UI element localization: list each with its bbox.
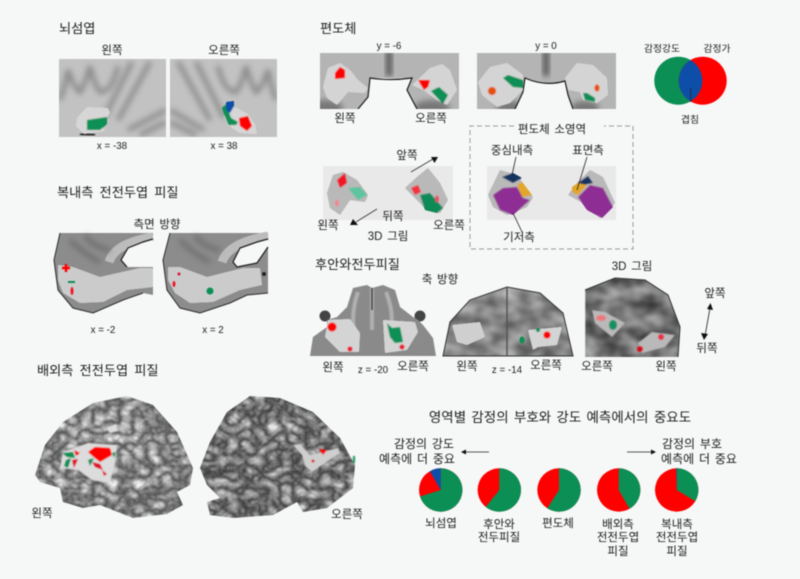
label: vmPFC: 피질: [666, 545, 688, 558]
chart title: 영역별 감정의 부호와 강도 예측에서의 중요도: [429, 410, 691, 425]
labels: z = -14 row: [456, 359, 562, 376]
panel: amygdala 3D view: [317, 149, 465, 243]
label: left: 왼쪽: [655, 359, 677, 373]
label: anterior: 앞쪽: [396, 149, 418, 162]
heading: dlPFC: 배외측 전전두엽 피질: [37, 363, 159, 378]
brain slice: y = -6: [319, 52, 460, 110]
heading: amygdala: 편도체: [320, 21, 356, 36]
label: x = -2: x = -2: [91, 325, 115, 336]
panel: dorsolateral prefrontal cortex: [30, 363, 363, 525]
labels: z = -20 row: 오른쪽: [397, 360, 429, 373]
brain slice: right insula: [170, 59, 277, 137]
labels: z = -20 row: [322, 360, 429, 376]
annotation: valence: [661, 437, 737, 466]
label: centromedial: 중심내측: [491, 144, 533, 157]
left subregions: [488, 170, 533, 215]
labels: z = -14 row: 오른쪽: [530, 359, 562, 372]
label: OFC: [478, 518, 520, 544]
annotation: valence: 감정의 부호: [662, 437, 722, 451]
panel: amygdala: [307, 21, 616, 125]
panel: importance pie charts: [379, 410, 737, 558]
label: anterior: 앞쪽: [704, 287, 726, 300]
arrow: anterior: [411, 157, 438, 172]
label: 3D view: 3D 그림: [612, 260, 652, 273]
arrow: anterior-posterior: [701, 303, 713, 340]
labels: z = -14 row: 왼쪽: [456, 359, 478, 373]
brain slice: left insula: [59, 59, 166, 137]
label: overlap: 겹침: [681, 114, 699, 126]
annotation: intensity: 감정의 강도: [394, 437, 454, 451]
right amygdala 3D: [405, 168, 448, 213]
brain render: right hemisphere: [195, 390, 360, 520]
label: insula: 뇌섬엽: [425, 517, 457, 530]
label: dlPFC: [597, 518, 639, 558]
brain slice: z = -20: [310, 285, 436, 356]
label: y = 0: y = 0: [535, 41, 557, 52]
left amygdala 3D: [327, 172, 368, 215]
pie: OFC: [478, 468, 521, 512]
label: vmPFC: 복내측: [661, 518, 693, 531]
brain render: left hemisphere: [34, 396, 194, 518]
labels: z = -14 row: z = -14: [492, 365, 523, 376]
label: left: 왼쪽: [31, 506, 53, 520]
label: emotional intensity: 감정강도: [644, 43, 680, 55]
label: right: 오른쪽: [331, 508, 363, 521]
label: OFC: 전두피질: [478, 531, 520, 544]
label: y = -6: y = -6: [377, 41, 402, 52]
panel: orbitofrontal cortex: [310, 257, 726, 376]
pie: amygdala: [537, 468, 581, 512]
annotation: valence: 예측에 더 중요: [661, 452, 737, 466]
label: x = -38: x = -38: [97, 141, 128, 152]
label: OFC: 후안와: [483, 518, 515, 531]
panel: amygdala subregions: [470, 123, 633, 249]
annotation: intensity: 예측에 더 중요: [379, 452, 455, 466]
label: left: 왼쪽: [334, 111, 356, 125]
pie: dlPFC: [597, 468, 640, 512]
arrow: right: [627, 450, 656, 454]
brain slice: y = 0: [476, 52, 616, 110]
heading: OFC: 후안와전두피질: [315, 257, 400, 272]
label: x = 38: x = 38: [211, 141, 238, 152]
label: left: 왼쪽: [317, 218, 339, 232]
label: dlPFC: 전전두엽: [597, 531, 639, 544]
heading: vmPFC: 복내측 전전두엽 피질: [57, 185, 179, 200]
label: vmPFC: [656, 518, 698, 558]
label: right: 오른쪽: [581, 360, 613, 373]
label: sagittal: 측면 방향: [133, 218, 181, 231]
label: right: 오른쪽: [433, 219, 465, 232]
label: right: 오른쪽: [415, 112, 447, 125]
label: superficial: 표면측: [572, 144, 604, 157]
label: 3D view: 3D 그림: [368, 230, 408, 243]
annotation: intensity: [379, 437, 455, 466]
label: posterior: 뒤쪽: [382, 210, 404, 223]
label: amygdala: 편도체: [542, 517, 574, 530]
pie: vmPFC: [655, 468, 698, 512]
brain slice: x = -2: [54, 233, 153, 313]
arrow: left: [461, 450, 489, 454]
label: vmPFC: 전전두엽: [656, 531, 698, 544]
label: dlPFC: 배외측: [602, 518, 634, 531]
brain slice: z = -14: [443, 285, 573, 357]
pie: insula: [419, 468, 462, 512]
panel: ventromedial prefrontal cortex: [54, 185, 268, 336]
arrow: posterior: [350, 209, 377, 225]
heading: subregions: 편도체 소영역: [518, 123, 586, 136]
leader lines: [512, 157, 587, 232]
legend: venn diagram: [644, 43, 731, 126]
label: x = 2: x = 2: [202, 325, 224, 336]
label: valence: 감정가: [703, 43, 731, 55]
label: left: 왼쪽: [101, 43, 123, 57]
label: basolateral: 기저측: [503, 231, 535, 244]
heading: insula: 뇌섬엽: [59, 21, 95, 36]
brain slice: x = 2: [163, 233, 268, 313]
panel: insula: [59, 21, 277, 152]
label: posterior: 뒤쪽: [696, 342, 718, 355]
label: right: 오른쪽: [208, 44, 240, 57]
brain render: OFC 3D: [585, 278, 681, 358]
right subregions: [568, 170, 615, 218]
label: dlPFC: 피질: [607, 545, 629, 558]
labels: z = -20 row: z = -20: [358, 365, 389, 376]
labels: z = -20 row: 왼쪽: [322, 360, 344, 374]
label: axial: 축 방향: [422, 273, 459, 286]
